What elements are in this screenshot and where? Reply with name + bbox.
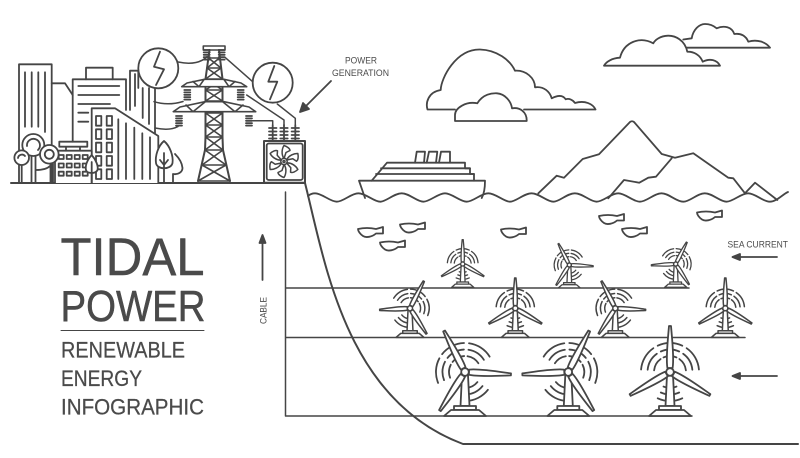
turbine 3 (650, 232, 706, 287)
turbine 6 (577, 269, 647, 337)
turbines row 3 (407, 312, 711, 416)
arrow: cable (260, 235, 266, 280)
insulators (176, 50, 252, 126)
bushings (269, 125, 299, 141)
transformer with fan (264, 125, 305, 183)
label: power generation (332, 56, 389, 79)
lower arm (173, 102, 256, 112)
turbines row 2 (378, 269, 753, 337)
ground line (11, 182, 305, 184)
cable frame (286, 192, 745, 416)
lower arm bracing (186, 102, 243, 112)
cloud large (427, 49, 596, 110)
icon: lightning circle left (138, 48, 178, 88)
ship (359, 152, 485, 198)
turbine 5 (488, 278, 543, 337)
upper arm (182, 79, 247, 87)
upper arm bracing (193, 80, 235, 87)
transmission tower (173, 46, 256, 181)
wires (154, 57, 295, 129)
cloud top right (683, 24, 770, 48)
cloud small (455, 93, 527, 121)
right back building (130, 71, 155, 133)
clouds (427, 24, 770, 121)
sea surface waves (308, 192, 788, 202)
turbine 7 (698, 278, 753, 337)
fan (267, 146, 301, 178)
arrow: power generation (300, 81, 331, 112)
tall building (19, 64, 52, 183)
turbine 2 (539, 234, 595, 288)
round trees (14, 134, 59, 183)
turbine 10 (629, 326, 711, 416)
subtitle: infographic: INFOGRAPHIC (61, 394, 204, 420)
fish school (358, 210, 722, 251)
turbine 8 (407, 312, 514, 416)
turbine 4 (378, 269, 448, 337)
cloud top middle (604, 36, 720, 66)
turbine 9 (520, 312, 626, 416)
city buildings (14, 64, 183, 183)
subtitle: renewable: RENEWABLE (61, 338, 185, 362)
label: sea current: SEA CURRENT (728, 240, 788, 250)
turbine 1 (441, 240, 485, 287)
icon: lightning circle right (253, 63, 293, 103)
title block (60, 228, 206, 420)
leaf trees (86, 141, 182, 183)
label: power generation: POWER (345, 56, 377, 66)
seabed curve (305, 183, 798, 444)
office building (73, 68, 126, 142)
heading: tidal: TIDAL (60, 228, 204, 287)
low building (55, 142, 92, 183)
label: power generation: GENERATION (332, 68, 389, 79)
heading: power: POWER (60, 282, 206, 331)
housing (264, 141, 305, 183)
front building (92, 108, 158, 183)
arrow: sea current upper (732, 254, 777, 260)
turbines row 1 (441, 232, 706, 288)
subtitle: energy: ENERGY (61, 366, 142, 391)
label: cable: CABLE (258, 297, 270, 324)
mountains (538, 121, 777, 200)
back building roof (52, 83, 73, 95)
arrow: sea current lower (732, 373, 777, 379)
